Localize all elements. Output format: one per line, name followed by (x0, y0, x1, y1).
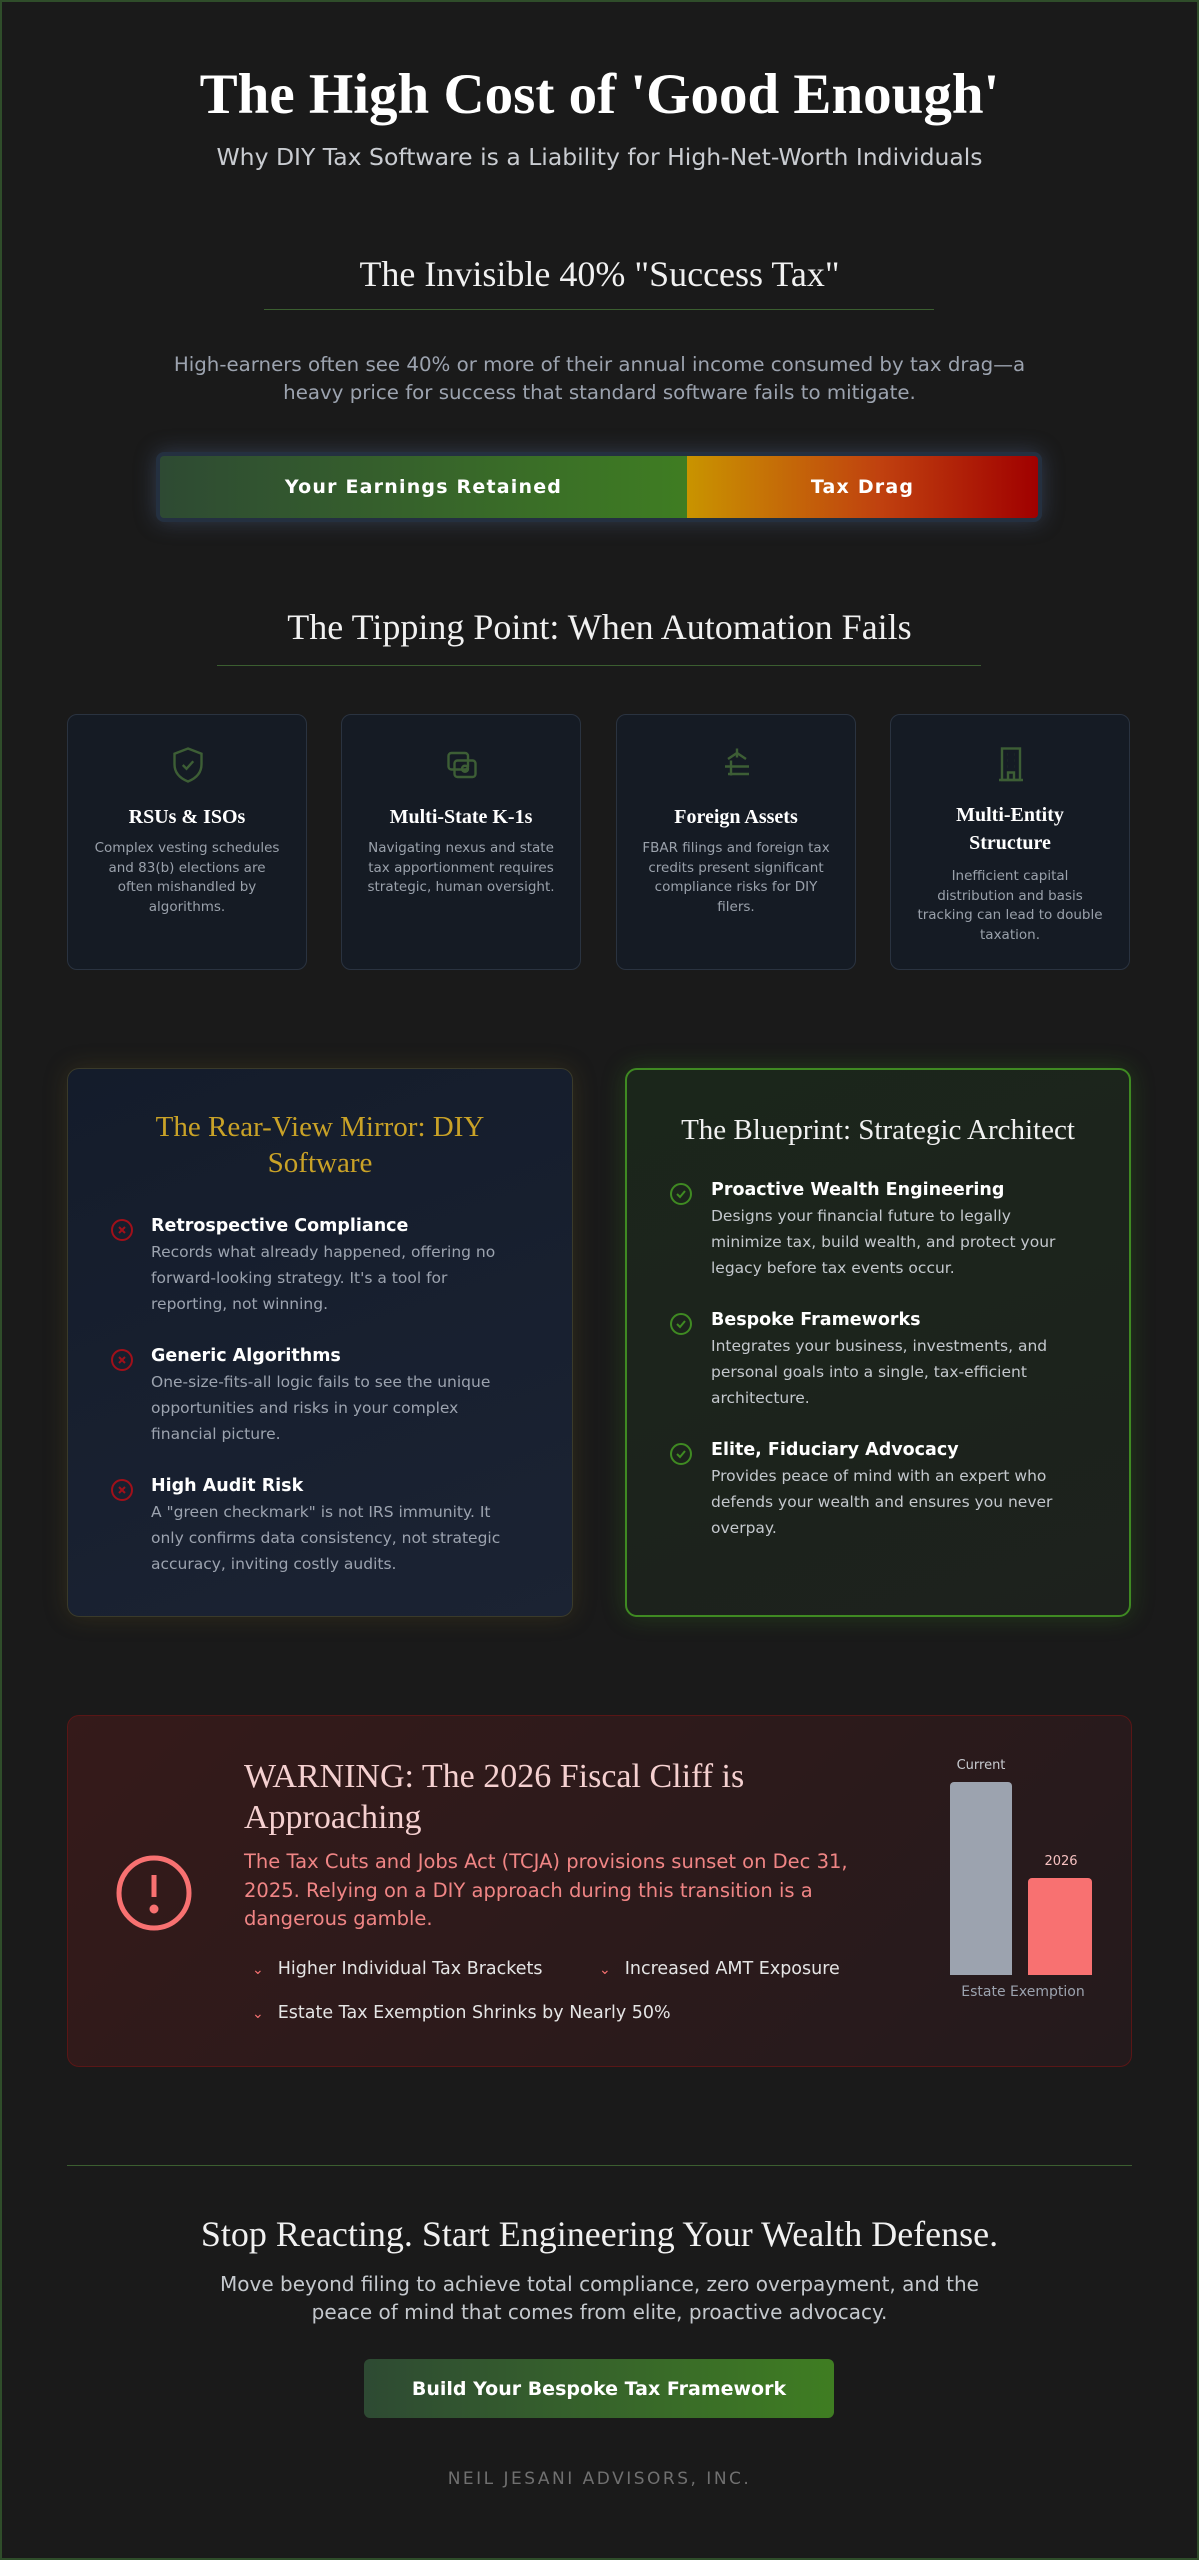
segment: tax drag (687, 456, 1038, 518)
card: K-1s (341, 714, 581, 970)
bullet list: ⌄ Higher Individual Tax Brackets (252, 1959, 543, 1979)
bullet list (252, 1959, 840, 2023)
icon: alert (116, 1856, 192, 1930)
heading: call to action: Stop Reacting. Start Engineering Your Wealth Defense. (201, 2214, 998, 2254)
button: Build Your Bespoke Tax Framework (412, 2378, 786, 2400)
card: K-1s: Multi-State K-1s (390, 806, 532, 828)
text: tax drag explanation: High-earners often see 40% or more of their annual income consumed by tax drag—a heavy price for success that standard software fails to mitigate. (174, 353, 1025, 404)
heading: tipping point: The Tipping Point: When Automation Fails (287, 607, 912, 647)
item 1: Proactive Wealth Engineering (711, 1180, 1004, 1200)
item 2: One-size-fits-all logic fails to see the unique opportunities and risks in your complex financial picture. (151, 1373, 490, 1443)
chart: estate exemption (950, 1758, 1092, 2000)
card: RSUs (67, 714, 307, 970)
item 1: Records what already happened, offering no forward-looking strategy. It's a tool for reporting, not winning. (151, 1243, 495, 1313)
item 3: Elite, Fiduciary Advocacy (711, 1440, 959, 1460)
item 1 (670, 1180, 1056, 1277)
card: Foreign: FBAR filings and foreign tax credits present significant compliance risks for DIY filers. (642, 840, 830, 915)
chart: estate exemption: Estate Exemption (961, 1984, 1085, 2000)
segment: retained: Your Earnings Retained (285, 476, 562, 498)
heading: The Rear-View Mirror: DIY Software (156, 1111, 484, 1179)
button (364, 2359, 834, 2418)
item 1: Retrospective Compliance (151, 1216, 408, 1236)
panel: warning 2026 (67, 1715, 1132, 2067)
item 3: A "green checkmark" is not IRS immunity. It only confirms data consistency, not strategic accuracy, inviting costly audits. (151, 1503, 500, 1573)
text: cta: Move beyond filing to achieve total compliance, zero overpayment, and the peace of mind that comes from elite, proactive advocacy. (220, 2272, 979, 2324)
item 1 (111, 1216, 495, 1313)
icon: building (999, 747, 1023, 782)
heading: The Blueprint: Strategic Architect (681, 1114, 1075, 1146)
bullet list: ⌄ Increased AMT Exposure (599, 1959, 840, 1979)
card: Multi-Entity: Inefficient capital distribution and basis tracking can lead to double taxation. (917, 868, 1103, 943)
text: The Tax Cuts and Jobs Act (TCJA) provisions sunset on Dec 31, 2025. Relying on a DIY approach during this transition is a dangerous gamble. (244, 1850, 848, 1930)
card: RSUs: Complex vesting schedules and 83(b) elections are often mishandled by algorithms. (95, 840, 279, 915)
icon: cash (447, 752, 477, 778)
card: Multi-Entity (890, 714, 1130, 970)
heading: invisible 40%: The Invisible 40% "Success Tax" (359, 254, 840, 294)
card: Foreign (616, 714, 856, 970)
icon: shield (173, 747, 203, 783)
icon: plane (725, 748, 749, 776)
segment: retained (160, 456, 687, 518)
footer: NEIL JESANI ADVISORS, INC. (448, 2469, 751, 2489)
card: RSUs: RSUs & ISOs (129, 806, 245, 828)
card: Foreign: Foreign Assets (674, 806, 798, 828)
heading: WARNING: The 2026 Fiscal Cliff is Approaching (244, 1758, 744, 1836)
item 1: Designs your financial future to legally minimize tax, build wealth, and protect your legacy before tax events occur. (711, 1207, 1055, 1277)
segment: tax drag: Tax Drag (811, 476, 914, 498)
item 2: Bespoke Frameworks (711, 1310, 921, 1330)
bullet list: ⌄ Estate Tax Exemption Shrinks by Nearly 50% (252, 2003, 671, 2023)
item 2 (111, 1346, 490, 1443)
title: The High Cost of 'Good Enough' (200, 63, 999, 126)
subtitle: Why DIY Tax Software is a Liability for High-Net-Worth Individuals (216, 143, 983, 171)
chart: estate exemption: Current (957, 1758, 1005, 1773)
item 2 (670, 1310, 1047, 1407)
item 3 (670, 1440, 1052, 1537)
item 3: High Audit Risk (151, 1476, 303, 1496)
item 3 (111, 1476, 500, 1573)
card: Multi-Entity: Multi-Entity (956, 804, 1064, 826)
bar: earnings vs tax drag (156, 452, 1042, 522)
panel: DIY software (67, 1068, 573, 1617)
panel: strategic architect (625, 1068, 1131, 1617)
item 3: Provides peace of mind with an expert who defends your wealth and ensures you never overpay. (711, 1467, 1052, 1537)
card: Multi-Entity: Structure (969, 832, 1051, 854)
chart: estate exemption: 2026 (1044, 1854, 1078, 1869)
card: K-1s: Navigating nexus and state tax apportionment requires strategic, human oversight. (367, 840, 555, 895)
item 2: Generic Algorithms (151, 1346, 341, 1366)
item 2: Integrates your business, investments, and personal goals into a single, tax-efficient architecture. (711, 1337, 1047, 1407)
